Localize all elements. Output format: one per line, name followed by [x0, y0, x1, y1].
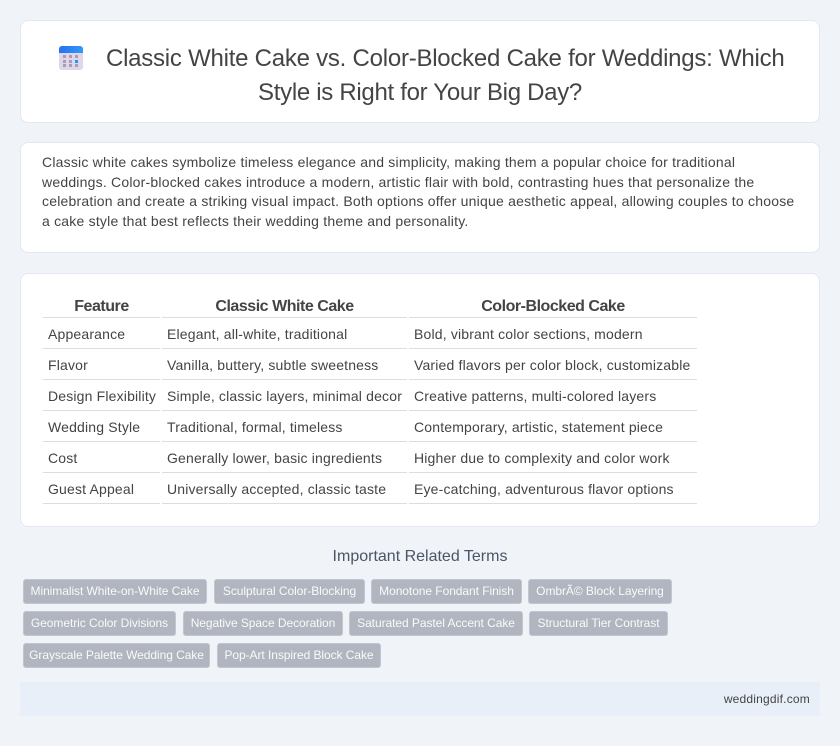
- heading: important related terms: Important Related Terms: [333, 548, 507, 565]
- footer source: weddingdif.com: [724, 692, 810, 706]
- intro paragraph: [42, 154, 794, 229]
- tag list: Saturated Pastel Accent Cake: [357, 616, 515, 630]
- tag list: Sculptural Color-Blocking: [223, 584, 356, 598]
- comparison table: Eye-catching, adventurous flavor options: [414, 481, 674, 497]
- comparison table: Color-Blocked Cake: [481, 298, 625, 315]
- title: Style is Right for Your Big Day?: [258, 79, 582, 106]
- footer bar: [20, 682, 820, 716]
- tag list: Monotone Fondant Finish: [379, 584, 514, 598]
- panel: comparison table: [20, 273, 820, 527]
- comparison table: Cost: [48, 450, 77, 466]
- tag list: Pop-Art Inspired Block Cake: [224, 648, 374, 662]
- comparison table: Wedding Style: [48, 419, 140, 435]
- intro paragraph: weddings. Color-blocked cakes introduce a modern, artistic flair with bold, contrasting hues that personalize the: [42, 174, 754, 190]
- comparison table: Traditional, formal, timeless: [167, 419, 343, 435]
- icon: calendar: [59, 46, 83, 70]
- comparison table: Universally accepted, classic taste: [167, 481, 386, 497]
- comparison table: Creative patterns, multi-colored layers: [414, 388, 656, 404]
- comparison table: Bold, vibrant color sections, modern: [414, 326, 643, 342]
- panel: title card: [20, 20, 820, 123]
- comparison table: Varied flavors per color block, customizable: [414, 357, 690, 373]
- tag list: Geometric Color Divisions: [31, 616, 168, 630]
- comparison table: [43, 298, 697, 504]
- tag list: Grayscale Palette Wedding Cake: [29, 648, 204, 662]
- comparison table: Classic White Cake: [215, 298, 354, 315]
- intro paragraph: a cake style that best reflects their wedding theme and personality.: [42, 213, 468, 229]
- comparison table: Vanilla, buttery, subtle sweetness: [167, 357, 378, 373]
- comparison table: Guest Appeal: [48, 481, 134, 497]
- comparison table: Appearance: [48, 326, 125, 342]
- tag list: [23, 579, 672, 668]
- comparison table: Contemporary, artistic, statement piece: [414, 419, 663, 435]
- panel: intro text: [20, 142, 820, 253]
- tag list: Minimalist White-on-White Cake: [31, 584, 199, 598]
- tag list: Structural Tier Contrast: [538, 616, 659, 630]
- title: Classic White Cake vs. Color-Blocked Cake for Weddings: Which: [106, 45, 784, 72]
- comparison table: Feature: [74, 298, 129, 315]
- tag list: Negative Space Decoration: [191, 616, 335, 630]
- comparison table: Simple, classic layers, minimal decor: [167, 388, 402, 404]
- comparison table: Flavor: [48, 357, 88, 373]
- comparison table: Generally lower, basic ingredients: [167, 450, 382, 466]
- intro paragraph: Classic white cakes symbolize timeless elegance and simplicity, making them a popular choice for traditional: [42, 154, 735, 170]
- comparison table: Design Flexibility: [48, 388, 156, 404]
- intro paragraph: celebration and create a striking visual impact. Both options offer unique aesthetic appeal, allowing couples to choose: [42, 193, 794, 209]
- comparison table: Elegant, all-white, traditional: [167, 326, 347, 342]
- comparison table: Higher due to complexity and color work: [414, 450, 670, 466]
- tag list: OmbrÃ© Block Layering: [536, 584, 664, 598]
- title: [106, 45, 784, 106]
